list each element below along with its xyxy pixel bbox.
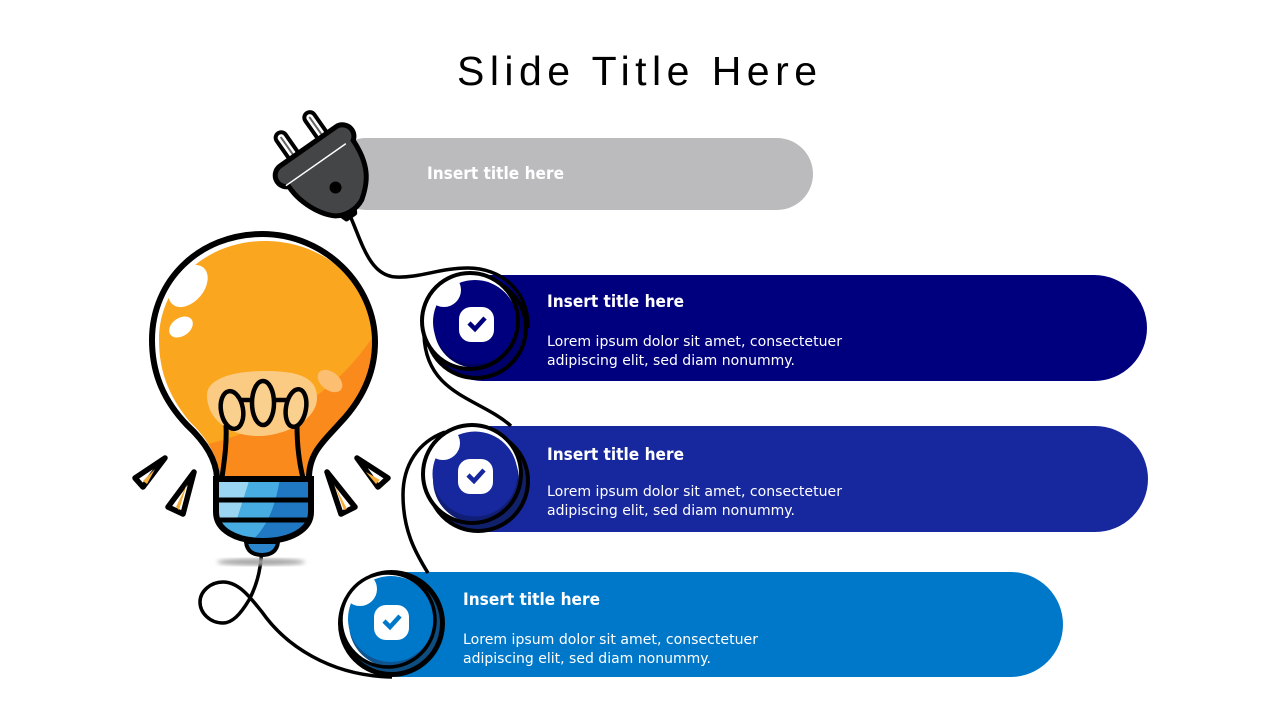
panel: royal blue pill — [430, 426, 1148, 532]
icon: plug — [260, 103, 390, 238]
panel: navy pill — [430, 275, 1147, 381]
bulb shadow — [217, 558, 305, 566]
icon: light rays — [135, 458, 388, 514]
panel: bright blue pill — [345, 572, 1063, 677]
cable from plug to first node — [351, 218, 528, 426]
bulb outline — [152, 234, 375, 478]
bulb orange fill — [159, 241, 372, 476]
royal blue pill title: Insert title here — [547, 445, 684, 464]
cable from bulb to third node — [200, 540, 392, 677]
navy pill title: Insert title here — [547, 292, 684, 311]
bright blue pill title: Insert title here — [463, 590, 600, 609]
icon: check 3 — [374, 605, 409, 640]
node 1 button — [422, 273, 526, 378]
gray pill title: Insert title here — [427, 164, 564, 183]
highlight spots — [160, 257, 216, 342]
bulb base — [219, 482, 308, 538]
base stripes — [217, 500, 310, 520]
plug plate outline — [274, 124, 355, 188]
base outline — [216, 479, 311, 541]
plug plate fill — [274, 124, 355, 188]
navy pill text: Lorem ipsum dolor sit amet, consectetuer — [547, 334, 842, 350]
royal blue pill text: adipiscing elit, sed diam nonummy. — [547, 503, 795, 519]
plug body fill — [289, 140, 382, 229]
node 3 button — [340, 572, 442, 674]
plug body outline — [289, 140, 382, 229]
ray 2 — [168, 472, 194, 514]
title: Slide Title Here — [457, 48, 817, 94]
bulb glass — [152, 234, 375, 478]
ray 4 — [357, 458, 388, 487]
plug hole — [327, 179, 344, 196]
bright blue pill text: adipiscing elit, sed diam nonummy. — [463, 651, 711, 667]
filament stem — [222, 425, 303, 478]
plug plate highlight — [286, 144, 345, 185]
royal blue pill text: Lorem ipsum dolor sit amet, consectetuer — [547, 484, 842, 500]
icon: check 1 — [459, 307, 494, 342]
bulb nub — [246, 542, 278, 555]
navy pill text: adipiscing elit, sed diam nonummy. — [547, 353, 795, 369]
filament loops — [218, 381, 309, 431]
filament glow — [207, 371, 317, 436]
plug prongs — [281, 118, 331, 168]
plug cord end — [337, 201, 360, 221]
ray accents — [143, 469, 380, 510]
ray 3 — [327, 472, 355, 514]
ray 1 — [135, 458, 165, 487]
icon: check 2 — [458, 459, 493, 494]
node 2 button — [423, 425, 528, 531]
cable from second node to third node — [403, 432, 445, 573]
icon: light bulb — [150, 230, 380, 566]
bright blue pill text: Lorem ipsum dolor sit amet, consectetuer — [463, 632, 758, 648]
panel: gray pill — [330, 138, 813, 210]
glass reflection — [318, 370, 342, 392]
